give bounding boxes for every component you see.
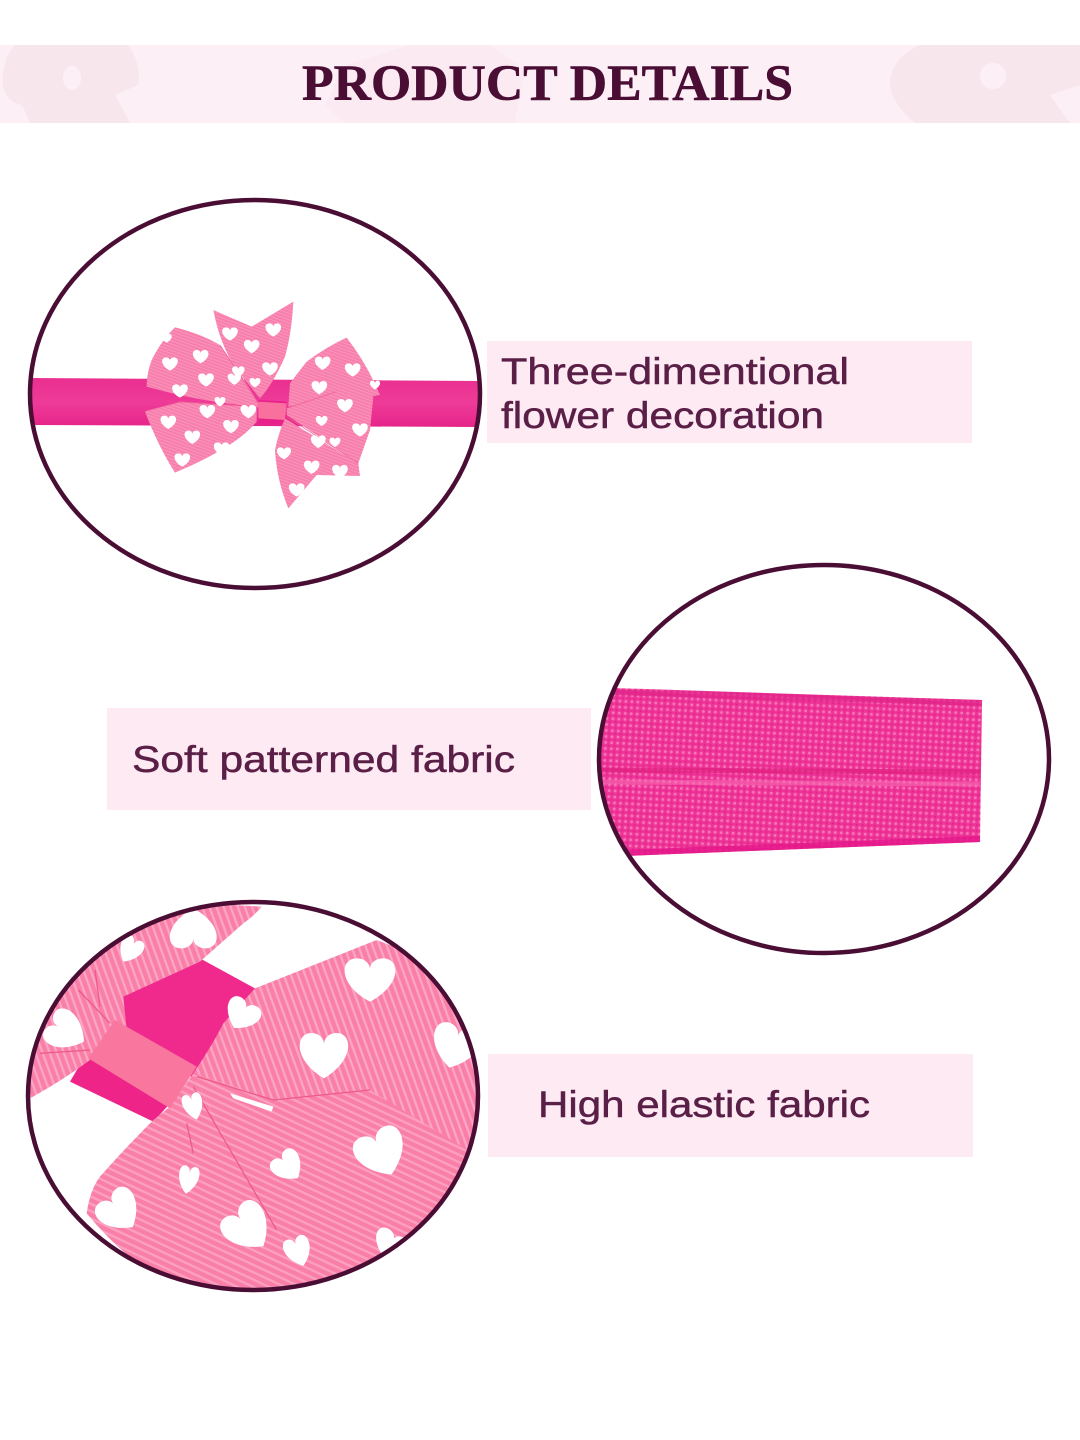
banner flower decorations xyxy=(3,45,1080,123)
label: three-dimensional decoration: Three-dimentional xyxy=(501,351,849,392)
panel: close-up bow circle xyxy=(20,902,493,1303)
label: three-dimensional decoration xyxy=(487,341,972,443)
bow close-up photo xyxy=(20,903,493,1303)
title: PRODUCT DETAILS xyxy=(302,56,793,112)
elastic fabric swatch xyxy=(596,688,982,856)
headband bow photo xyxy=(30,302,480,508)
header banner xyxy=(0,45,1080,123)
label: soft patterned fabric xyxy=(107,708,591,810)
label: high elastic fabric xyxy=(488,1054,973,1157)
label: soft patterned fabric: Soft patterned fabric xyxy=(132,739,515,780)
elastic band xyxy=(30,378,480,427)
label: high elastic fabric: High elastic fabric xyxy=(538,1084,870,1125)
label: three-dimensional decoration: flower decoration xyxy=(501,395,824,436)
panel: fabric band circle xyxy=(596,565,1049,953)
panel: bow headband circle xyxy=(30,200,480,588)
